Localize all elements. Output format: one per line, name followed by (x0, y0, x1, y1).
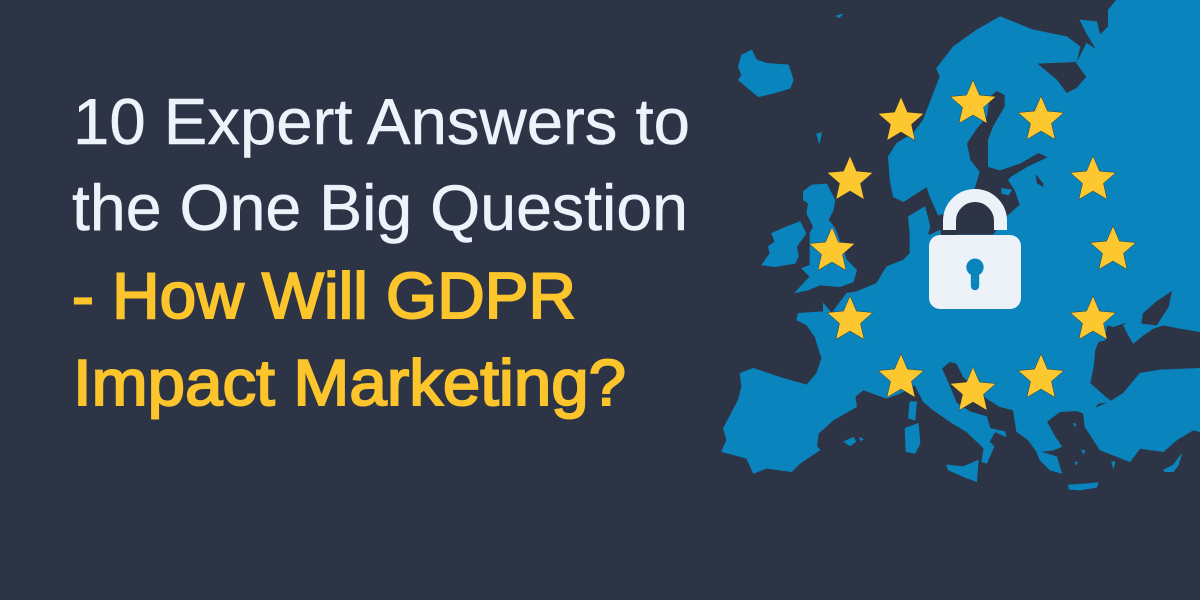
Great Britain (795, 184, 857, 293)
padlock shackle (950, 196, 1000, 230)
star 6 (1018, 354, 1064, 397)
star 2 (1018, 96, 1064, 139)
star 9 (827, 296, 873, 339)
star 5 (1070, 296, 1116, 339)
Cyprus (1163, 454, 1182, 472)
Ireland (762, 222, 806, 267)
Danish islands (920, 230, 942, 248)
map of Europe (722, 0, 1200, 490)
star 3 (1070, 156, 1116, 199)
title (72, 85, 690, 419)
Balearic islands (844, 437, 863, 446)
star 7 (950, 367, 996, 410)
star 12 (878, 97, 924, 140)
star 1 (950, 80, 996, 123)
Baltic island (1002, 188, 1012, 195)
title line 4, highlighted: Impact Marketing? (73, 346, 626, 419)
title line 1: 10 Expert Answers to (73, 85, 690, 158)
mainland Europe and Russia (722, 0, 1200, 473)
Crete (1068, 483, 1098, 490)
Turkey (1083, 368, 1200, 462)
padlock body (929, 235, 1021, 309)
icon: padlock (929, 196, 1021, 309)
star 4 (1090, 226, 1136, 269)
Faroe and Jan Mayen islets (817, 14, 843, 143)
title line 3, highlighted: - How Will GDPR (72, 259, 576, 332)
star 10 (809, 227, 855, 270)
Corsica (908, 402, 917, 420)
title line 2: the One Big Question (72, 171, 688, 244)
EU star circle (809, 80, 1136, 410)
Lake Peipus (1036, 175, 1043, 187)
star 11 (827, 156, 873, 199)
Sea of Azov (1142, 292, 1172, 325)
star 8 (878, 354, 924, 397)
padlock keyhole (966, 258, 984, 290)
Aegean islands (1073, 423, 1115, 468)
Sicily (947, 460, 978, 482)
Sardinia (905, 423, 920, 453)
Iceland (738, 50, 793, 97)
